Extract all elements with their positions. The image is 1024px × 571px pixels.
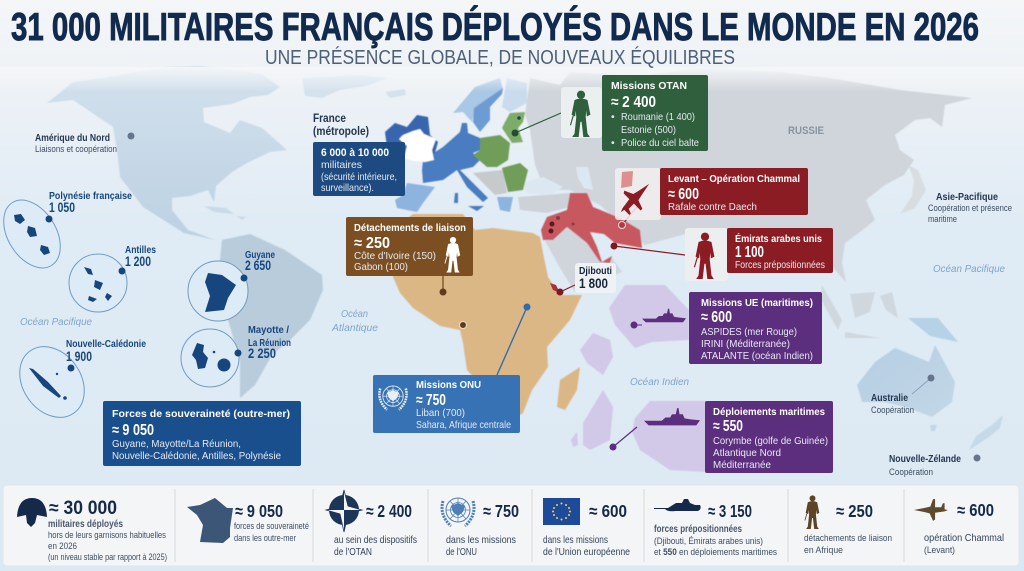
panel: Levant Opération Chammal (612, 168, 808, 228)
panel: Émirats arabes unis: Forces prépositionnées (735, 259, 825, 271)
ocean labels: Océan (341, 308, 368, 320)
panel: Missions UE maritimes: ≈ 600 (701, 309, 732, 326)
label: Nouvelle-Zélande: Nouvelle-Zélande (889, 453, 961, 465)
inset: Nouvelle-Calédonie: 1 900 (66, 349, 92, 364)
stat: 3 150 (654, 499, 777, 558)
panel: Détachements de liaison (346, 217, 473, 328)
Europe: Sweden (473, 88, 503, 132)
panel: Détachements de liaison: Côte d'Ivoire (150) (354, 250, 436, 262)
land: Africa (390, 214, 582, 425)
inset: Antilles: Antilles (125, 244, 156, 256)
stat: 600 Chammal: opération Chammal (924, 532, 1004, 544)
stat: 250: ≈ 250 (836, 501, 873, 521)
panel: Missions UE maritimes: ATALANTE (océan Indien) (701, 350, 813, 362)
stat: 250 (804, 495, 892, 556)
panel: Forces de souveraineté: Guyane, Mayotte/La Réunion, (112, 438, 241, 450)
label: Russie: RUSSIE (788, 125, 824, 137)
stat: 750 ONU: dans les missions (446, 534, 516, 546)
stat: 750 ONU: de l'ONU (446, 546, 477, 558)
inset: Nouvelle-Calédonie (6, 334, 146, 430)
stat: 600 Chammal (914, 499, 1004, 556)
panel: Missions OTAN: • (611, 111, 615, 123)
label: Australie: Australie (871, 392, 908, 404)
stat: 30 000: militaires déployés (48, 518, 123, 530)
top fade (0, 67, 1024, 92)
stat: 600 UE (543, 498, 630, 558)
panel: Forces de souveraineté: Forces de souveraineté (outre-mer) (112, 408, 290, 420)
stat: 30 000: hors de leurs garnisons habituelles (48, 530, 166, 541)
panel: Levant Opération Chammal: ≈ 600 (668, 186, 699, 203)
stat: 600 Chammal: (Levant) (924, 545, 955, 556)
ocean labels: Océan Pacifique (20, 316, 92, 328)
panel: Missions ONU: Liban (700) (416, 407, 465, 419)
ocean labels: Océan Indien (630, 376, 689, 388)
land: New Zealand (969, 415, 1003, 450)
panel: Émirats arabes unis: Émirats arabes unis (735, 232, 822, 245)
stat: 250: détachements de liaison (804, 533, 892, 544)
inset: Polynésie française: Polynésie française (49, 190, 132, 202)
stat: 750 ONU: ≈ 750 (483, 501, 519, 521)
inset: Guyane (188, 249, 275, 321)
Europe: Poland and Central Europe green (473, 135, 510, 167)
land: North America (47, 66, 287, 240)
panel: France métropole: (sécurité intérieure, (321, 171, 397, 183)
panel: Levant Opération Chammal: Levant – Opération Chammal (668, 173, 800, 185)
panel: bottom summary bar (3, 485, 1019, 566)
panel: Détachements de liaison: Détachements de liaison (354, 222, 466, 234)
label: Amérique du Nord (35, 132, 134, 155)
France (399, 129, 436, 162)
stat: 30 000: en 2026 (48, 541, 77, 552)
stat: 750 ONU (442, 498, 519, 558)
panel: Forces de souveraineté: Nouvelle-Calédonie, Antilles, Polynésie (112, 450, 281, 462)
inset: Mayotte et La Réunion: 2 250 (248, 346, 276, 361)
ocean labels (20, 263, 1005, 388)
land: Madagascar (557, 367, 580, 410)
location dots: Levant (548, 216, 574, 234)
panel: Déploiements maritimes: Méditerranée (713, 459, 771, 471)
land: Eurasia (525, 68, 972, 282)
stat: 600 UE: dans les missions (543, 534, 608, 546)
panel: France métropole: surveillance). (321, 182, 374, 194)
panel: Détachements de liaison: ≈ 250 (354, 235, 390, 252)
label: Djibouti: 1 800 (579, 276, 608, 291)
panel: Déploiements maritimes: ≈ 550 (713, 418, 743, 435)
stat: 2 400 OTAN: ≈ 2 400 (366, 501, 412, 521)
panel: Déploiements maritimes: Déploiements maritimes (713, 406, 825, 418)
panel: Missions OTAN: ≈ 2 400 (611, 94, 656, 111)
stat: 9 050: forces de souveraineté (234, 521, 309, 532)
panel: Missions ONU: ≈ 750 (416, 392, 446, 409)
land: Greenland and Iceland (302, 75, 406, 98)
panel: Missions ONU (373, 304, 530, 433)
inset: Guyane: 2 650 (245, 258, 271, 273)
panel: Déploiements maritimes (610, 401, 833, 473)
label: Nouvelle-Zélande (889, 453, 980, 478)
inset: Antilles: 1 200 (125, 254, 151, 269)
panel: Missions OTAN: • (611, 137, 615, 149)
inset: Polynésie française: 1 050 (49, 200, 75, 215)
stat: 9 050: dans les outre-mer (234, 533, 296, 544)
stat: 30 000 (17, 498, 167, 563)
Europe: Spain (395, 183, 435, 212)
stat: 2 400 OTAN: au sein des dispositifs (334, 534, 417, 546)
panel: Déploiements maritimes: Atlantique Nord (713, 447, 781, 459)
panel: Missions UE maritimes: IRINI (Méditerranée) (701, 338, 790, 350)
land: Turkey (518, 193, 570, 213)
land: Caribbean (204, 206, 246, 220)
label: Asie-Pacifique (928, 191, 1012, 225)
land: Japan (900, 165, 926, 214)
seas: Black Sea and Caspian (523, 167, 593, 195)
panel: Missions OTAN: Roumanie (1 400) (621, 111, 695, 123)
Levant and Iraq (541, 193, 642, 263)
panel: Missions OTAN: Missions OTAN (611, 80, 687, 92)
stat: 3 150: forces prépositionnées (654, 523, 742, 535)
Europe: Norway (453, 78, 503, 122)
stat: 9 050 (187, 498, 309, 544)
panel: France métropole: militaires (321, 159, 362, 171)
inset: Mayotte et La Réunion (181, 324, 291, 387)
inset: Mayotte et La Réunion: Mayotte / (248, 324, 289, 336)
panel: France métropole: France (313, 113, 346, 125)
Europe: Finland (502, 78, 527, 112)
Europe: Romania and Bulgaria green (502, 163, 528, 192)
panel: France métropole: 6 000 à 10 000 (321, 147, 389, 159)
inset: Antilles (69, 244, 156, 312)
stat: 2 400 OTAN: de l'OTAN (334, 546, 372, 558)
stat: 600 Chammal: ≈ 600 (957, 500, 994, 520)
stat: 2 400 OTAN (326, 490, 417, 558)
maritime zones (571, 285, 706, 472)
Europe: islands (454, 193, 484, 211)
subtitle: UNE PRÉSENCE GLOBALE, DE NOUVEAUX ÉQUILIBRES (265, 46, 735, 69)
panel: France métropole: (métropole) (313, 126, 369, 138)
stat: 30 000: ≈ 30 000 (49, 498, 117, 519)
stat: 600 UE: de l'Union européenne (543, 546, 630, 558)
ocean labels: Atlantique (331, 322, 378, 334)
label: Djibouti: Djibouti (579, 265, 612, 277)
land: Indonesia and Papua (820, 285, 898, 338)
world map (47, 66, 1003, 472)
stat: 600 UE: ≈ 600 (589, 501, 627, 521)
panel: Missions OTAN (512, 75, 708, 151)
stat: 3 150: (Djibouti, Émirats arabes unis) (654, 536, 763, 547)
stat: 3 150: ≈ 3 150 (708, 501, 752, 521)
label: Djibouti (550, 263, 616, 296)
panel: Détachements de liaison: Gabon (100) (354, 261, 408, 273)
inset: Mayotte et La Réunion: La Réunion (248, 337, 291, 349)
label: Amérique du Nord: Amérique du Nord (35, 132, 110, 144)
label: Asie-Pacifique: maritime (928, 214, 957, 225)
land: Australia (857, 345, 955, 431)
stat: 3 150: et 550 en déploiements maritimes (654, 547, 777, 558)
land: South America (218, 234, 323, 398)
panel: Forces de souveraineté: ≈ 9 050 (112, 422, 154, 439)
panel: Déploiements maritimes: Corymbe (golfe de Guinée) (713, 435, 828, 447)
panel: Missions ONU: Sahara, Afrique centrale (416, 419, 511, 431)
Europe: Baltics green (502, 112, 525, 143)
label: Asie-Pacifique: Asie-Pacifique (936, 191, 998, 203)
panel: Missions UE maritimes: ASPIDES (mer Rouge) (701, 326, 797, 338)
land: Arabia (543, 227, 622, 292)
inset: Nouvelle-Calédonie: Nouvelle-Calédonie (66, 338, 146, 350)
panel: Émirats arabes unis: 1 100 (735, 244, 764, 261)
Europe: United Kingdom, Ireland and Benelux ring (385, 115, 438, 158)
Europe: central blue zone (422, 123, 488, 202)
panel: Missions ONU: Missions ONU (416, 379, 481, 391)
label: Amérique du Nord: Liaisons et coopération (35, 144, 117, 155)
inset: Guyane: Guyane (245, 249, 275, 261)
label: Australie: Coopération (871, 405, 914, 416)
Europe: Greece (497, 197, 513, 212)
stat: 30 000: (un niveau stable par rapport à 2025) (48, 552, 167, 563)
stat: 250: en Afrique (804, 545, 843, 556)
panel: Missions UE maritimes (630, 292, 822, 364)
ocean labels: Océan Pacifique (933, 263, 1005, 275)
panel: Émirats arabes unis (610, 228, 833, 281)
panel: Missions UE maritimes: Missions UE (maritimes) (701, 297, 813, 309)
Europe: Balkans grey (473, 170, 507, 195)
label: Australie (871, 374, 934, 416)
stat: 9 050: ≈ 9 050 (235, 501, 283, 521)
panel: Missions OTAN: Police du ciel balte (621, 137, 699, 149)
panel: Levant Opération Chammal: Rafale contre Daech (668, 201, 757, 213)
label: Nouvelle-Zélande: Coopération (889, 467, 933, 478)
panel: Missions OTAN: Estonie (500) (621, 124, 676, 136)
panel: France métropole (313, 113, 405, 196)
inset: Polynésie française (0, 190, 132, 278)
panel: Forces de souveraineté (103, 401, 301, 466)
